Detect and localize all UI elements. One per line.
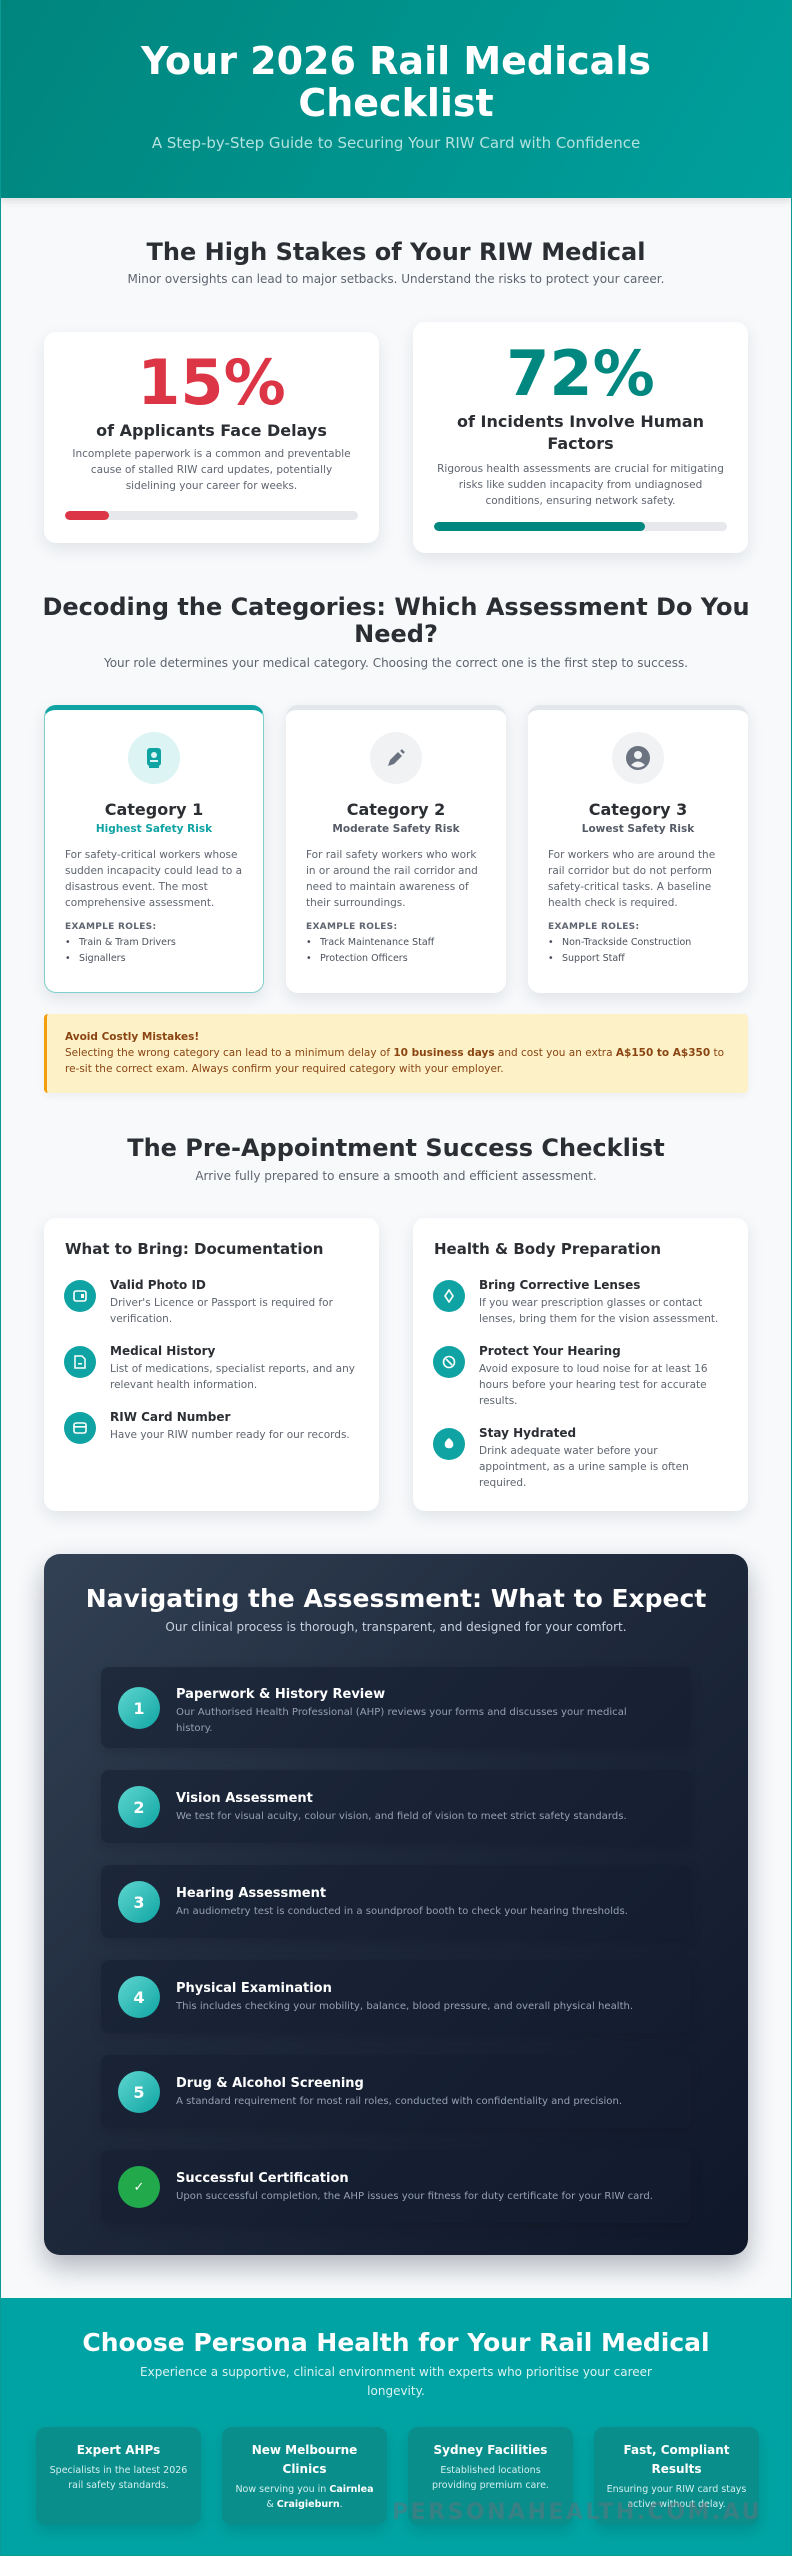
- callout: avoid costly mistakes: [44, 1014, 748, 1093]
- stat desc: Rigorous health assessments are crucial for mitigating risks like sudden incapacity from undiagnosed conditions, ensuring network safety.: [437, 463, 724, 507]
- feature: sydney: Sydney Facilities: [434, 2443, 547, 2457]
- item: riw card number: Have your RIW number ready for our records.: [110, 1429, 350, 1441]
- step 6: certification: Successful Certification: [176, 2171, 349, 2186]
- stat title: of Applicants Face Delays: [96, 421, 327, 440]
- step 4: This includes checking your mobility, balance, blood pressure, and overall physical health.: [176, 2001, 633, 2012]
- item: photo id: Valid Photo ID: [110, 1278, 206, 1292]
- stat number 72%: 72%: [506, 337, 655, 410]
- step 5: 5: [133, 2082, 145, 2102]
- subtitle: categories: Your role determines your medical category. Choosing the correct one is the first step to success.: [104, 656, 688, 670]
- item: hearing: Avoid exposure to loud noise for at least 16 hours before your hearing test for accurate results.: [479, 1363, 708, 1407]
- icon: badge: [128, 732, 180, 784]
- category card 3: For workers who are around the rail corridor but do not perform safety-critical tasks. A baseline health check is required.: [548, 849, 715, 909]
- panel title: What to Bring: Documentation: [65, 1240, 323, 1258]
- stat card: 72%: [413, 322, 748, 553]
- step 3: 3: [133, 1892, 145, 1912]
- stat number 15%: 15%: [137, 346, 286, 419]
- step 6: certification: Upon successful completion, the AHP issues your fitness for duty certificate for your RIW card.: [176, 2191, 653, 2202]
- step 2: 2: [133, 1798, 145, 1816]
- title: Your 2026 Rail Medicals: [141, 39, 651, 83]
- category card 1: [44, 705, 264, 993]
- heading: high stakes: The High Stakes of Your RIW Medical: [147, 238, 645, 266]
- category card 1: Signallers: [79, 953, 126, 964]
- title: Checklist: [298, 81, 494, 125]
- step 2: [101, 1770, 691, 1843]
- step 4: [101, 1960, 691, 2033]
- item: lenses: If you wear prescription glasses or contact lenses, bring them for the vision assessment.: [479, 1297, 718, 1325]
- item: hearing: [433, 1344, 708, 1407]
- callout: avoid costly mistakes: Avoid Costly Mistakes!: [65, 1031, 199, 1043]
- feature: fast results: Ensuring your RIW card stays active without delay.: [607, 2484, 746, 2510]
- subtitle: navigating: Our clinical process is thorough, transparent, and designed for your comfort.: [165, 1620, 627, 1634]
- category card 2: Category 2: [347, 800, 445, 819]
- step 1: Our Authorised Health Professional (AHP) reviews your forms and discusses your medical: [176, 1707, 627, 1718]
- category card 2: Track Maintenance Staff: [320, 937, 434, 948]
- step 2: We test for visual acuity, colour vision, and field of vision to meet strict safety standards.: [176, 1811, 627, 1822]
- header: [0, 0, 792, 198]
- watermark: PERSONAHEALTH.COM.AU: [392, 2500, 762, 2525]
- feature: fast results: Fast, Compliant Results: [624, 2443, 729, 2476]
- feature: expert AHPs: Expert AHPs: [77, 2443, 160, 2457]
- step 5: A standard requirement for most rail roles, conducted with confidentiality and precision.: [176, 2096, 622, 2107]
- feature: sydney: [408, 2427, 573, 2525]
- feature: melbourne: [222, 2427, 387, 2525]
- panel title: Health & Body Preparation: [434, 1240, 661, 1258]
- category card 2: EXAMPLE ROLES:: [306, 922, 397, 932]
- category card 3: EXAMPLE ROLES:: [548, 922, 639, 932]
- item: riw card number: RIW Card Number: [110, 1410, 230, 1424]
- title: [140, 39, 651, 125]
- item: photo id: [64, 1278, 333, 1325]
- stat title: of Incidents Involve Human Factors: [457, 412, 704, 453]
- item: medical history: List of medications, specialist reports, and any relevant health information.: [110, 1363, 355, 1391]
- item: hydrated: Stay Hydrated: [479, 1426, 576, 1440]
- subtitle: high stakes: Minor oversights can lead to major setbacks. Understand the risks to protect your career.: [128, 272, 664, 286]
- feature: melbourne: New Melbourne Clinics: [252, 2443, 357, 2476]
- category card 2: Moderate Safety Risk: [332, 823, 460, 835]
- feature: expert AHPs: Specialists in the latest 2026 rail safety standards.: [50, 2465, 187, 2491]
- step 1: history.: [176, 1723, 212, 1734]
- item: medical history: [64, 1344, 355, 1391]
- step 5: Drug & Alcohol Screening: [176, 2076, 364, 2091]
- panel: documentation: [44, 1218, 379, 1511]
- footer heading: Choose Persona Health for Your Rail Medical: [82, 2328, 710, 2357]
- step 1: Paperwork & History Review: [176, 1687, 385, 1702]
- step 3: [101, 1865, 691, 1938]
- stat card: 15%: [44, 332, 379, 543]
- step 4: 4: [133, 1988, 145, 2006]
- step 4: Physical Examination: [176, 1981, 332, 1996]
- stat desc: Incomplete paperwork is a common and preventable cause of stalled RIW card updates, potentially sidelining your career for weeks.: [72, 448, 351, 492]
- category card 2: Protection Officers: [320, 953, 408, 964]
- panel: health preparation: [413, 1218, 748, 1511]
- category card 3: Category 3: [589, 800, 687, 819]
- step 2: Vision Assessment: [176, 1791, 313, 1806]
- category card 3: [528, 705, 748, 993]
- icon: user: [612, 732, 664, 784]
- footer subtitle: Experience a supportive, clinical environment with experts who prioritise your career longevity.: [140, 2365, 652, 2398]
- step 1: [101, 1667, 691, 1748]
- category card 1: For safety-critical workers whose sudden incapacity could lead to a disastrous event. The most comprehensive assessment.: [65, 849, 242, 909]
- feature: expert AHPs: [36, 2427, 201, 2525]
- category card 1: Highest Safety Risk: [96, 823, 212, 835]
- item: lenses: [433, 1278, 718, 1325]
- item: hydrated: Drink adequate water before your: [479, 1445, 658, 1457]
- step 6: certification: [101, 2150, 691, 2223]
- category card 1: EXAMPLE ROLES:: [65, 922, 156, 932]
- subtitle: A Step-by-Step Guide to Securing Your RIW Card with Confidence: [152, 134, 640, 152]
- footer: [0, 2298, 792, 2556]
- item: photo id: Driver's Licence or Passport is required for verification.: [110, 1297, 333, 1325]
- category card 3: Lowest Safety Risk: [582, 823, 694, 835]
- category card 2: For rail safety workers who work in or around the rail corridor and need to maintain awareness of their surroundings.: [306, 849, 478, 909]
- step 6: certification: ✓: [134, 2180, 144, 2194]
- heading: categories: Decoding the Categories: Which Assessment Do You Need?: [42, 593, 750, 648]
- feature: sydney: Established locations providing premium care.: [432, 2465, 549, 2491]
- step 1: 1: [133, 1698, 145, 1718]
- item: medical history: Medical History: [110, 1344, 215, 1358]
- item: lenses: Bring Corrective Lenses: [479, 1278, 640, 1292]
- category card 1: Category 1: [105, 800, 203, 819]
- heading: navigating: Navigating the Assessment: What to Expect: [86, 1584, 706, 1613]
- step 5: [101, 2055, 691, 2128]
- category card 2: [286, 705, 506, 993]
- panel: navigating the assessment: [44, 1554, 748, 2255]
- item: hydrated: appointment, as a urine sample is often: [479, 1461, 689, 1473]
- progress bar 15%: [65, 511, 358, 520]
- category card 1: Train & Tram Drivers: [79, 937, 176, 948]
- icon: tools: [370, 732, 422, 784]
- progress bar 72%: [434, 522, 727, 531]
- callout: avoid costly mistakes: Selecting the wrong category can lead to a minimum delay of 10 business days and cost you an extra A$150 to A$350 to re-sit the correct exam. Always confirm your required category with your employer.: [65, 1047, 724, 1075]
- step 3: An audiometry test is conducted in a soundproof booth to check your hearing thresholds.: [176, 1906, 628, 1917]
- category card 3: Non-Trackside Construction: [562, 937, 691, 948]
- category card 3: Support Staff: [562, 953, 625, 964]
- item: hydrated: [433, 1426, 689, 1489]
- heading: checklist: The Pre-Appointment Success Checklist: [127, 1134, 665, 1162]
- feature: melbourne: Now serving you in Cairnlea & Craigieburn.: [235, 2484, 374, 2510]
- feature: fast results: [594, 2427, 759, 2525]
- item: hearing: Protect Your Hearing: [479, 1344, 621, 1358]
- item: hydrated: required.: [479, 1477, 526, 1489]
- subtitle: checklist: Arrive fully prepared to ensure a smooth and efficient assessment.: [195, 1169, 597, 1183]
- item: riw card number: [64, 1410, 350, 1444]
- step 3: Hearing Assessment: [176, 1886, 326, 1901]
